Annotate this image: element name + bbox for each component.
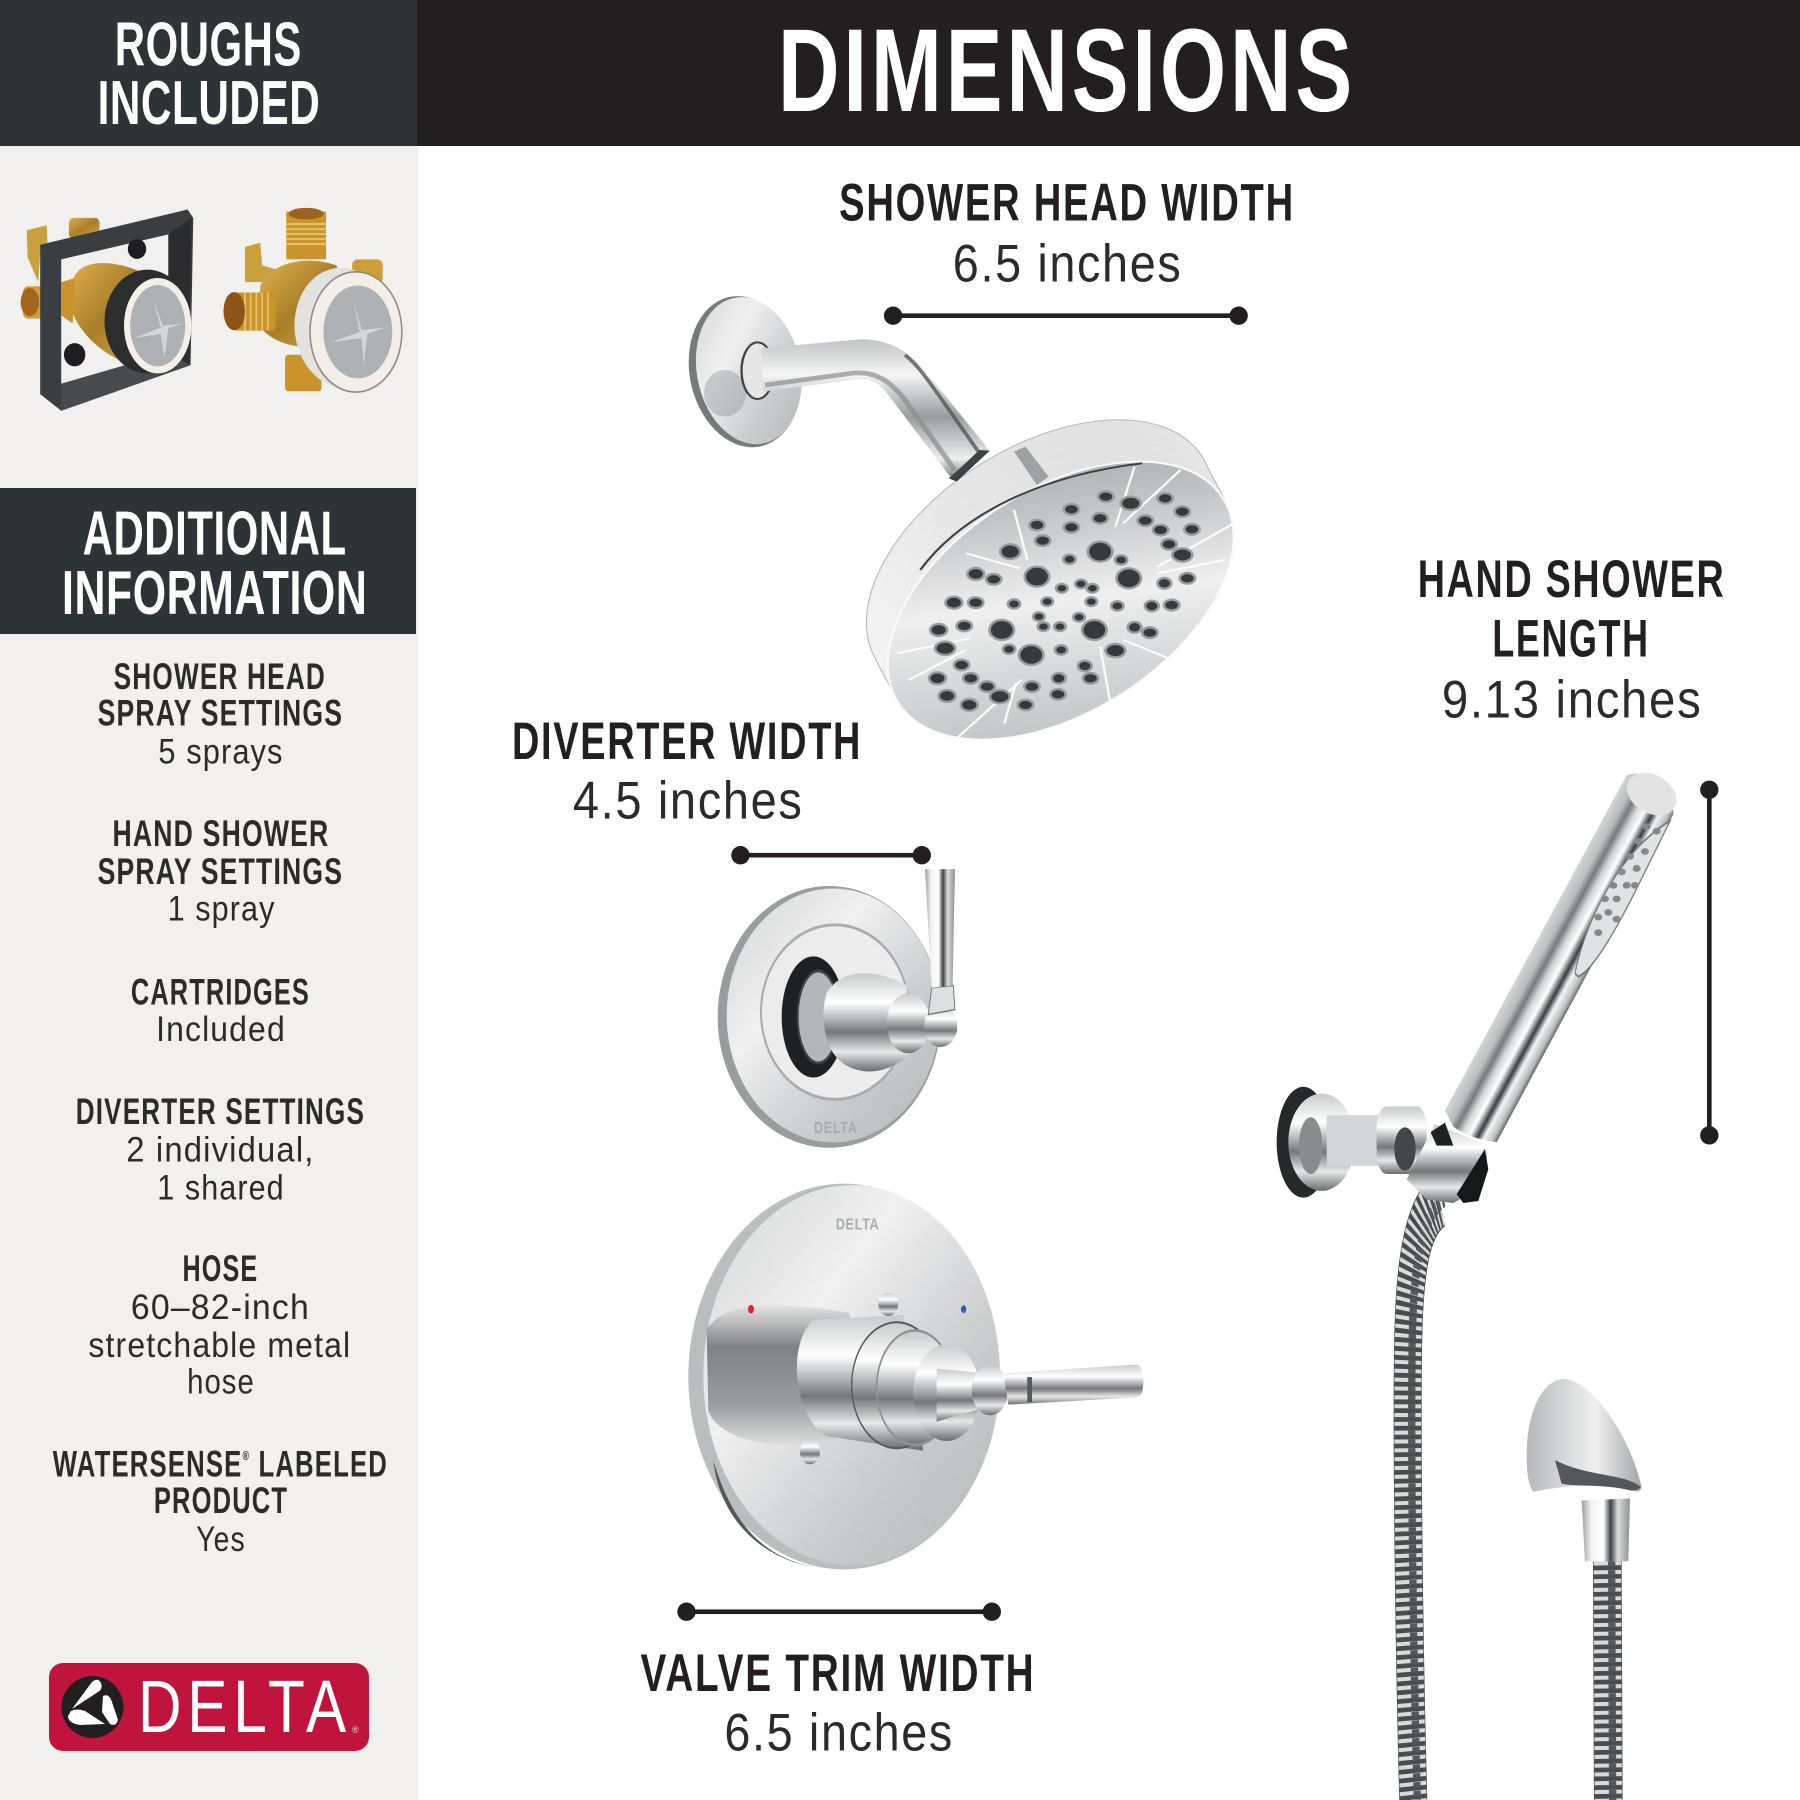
shower head body bbox=[806, 364, 1290, 786]
specification list bbox=[53, 656, 388, 1559]
spec: hose: stretchable metal bbox=[88, 1325, 351, 1365]
spec: shower head spray settings: 5 sprays bbox=[158, 731, 284, 771]
spec: hose: 60–82-inch bbox=[131, 1287, 310, 1327]
label: shower head width: 6.5 inches bbox=[953, 234, 1182, 293]
heading: roughs included: INCLUDED bbox=[98, 69, 320, 138]
spec: watersense labeled product: Yes bbox=[196, 1519, 246, 1559]
band: additional information bbox=[0, 488, 416, 634]
spec: diverter settings: DIVERTER SETTINGS bbox=[76, 1091, 365, 1132]
logo: delta: DELTA bbox=[138, 1665, 352, 1748]
label: valve trim width bbox=[641, 1644, 1035, 1763]
spec: watersense labeled product: PRODUCT bbox=[154, 1480, 288, 1521]
heading: additional information: ADDITIONAL bbox=[83, 499, 347, 568]
valve trim bbox=[688, 1184, 1143, 1569]
label: shower head width: SHOWER HEAD WIDTH bbox=[839, 173, 1295, 232]
left column background bbox=[0, 146, 418, 1800]
logo: delta: ® bbox=[352, 1725, 359, 1735]
rough valve with mounting frame bbox=[21, 210, 193, 411]
label: valve trim width: 6.5 inches bbox=[724, 1704, 954, 1763]
dimension labels and measure lines bbox=[512, 173, 1725, 1763]
spec: diverter settings bbox=[76, 1091, 365, 1208]
spec: watersense labeled product: WATERSENSE bbox=[53, 1443, 324, 1484]
heading: roughs included bbox=[98, 10, 320, 138]
measure line: valve trim width bbox=[677, 1603, 1001, 1621]
illustration: hand shower bbox=[1277, 767, 1678, 1800]
label: diverter width: 4.5 inches bbox=[573, 771, 804, 830]
measure line: diverter width bbox=[731, 846, 931, 864]
spec: hand shower spray settings: SPRAY SETTINGS bbox=[98, 851, 343, 892]
label: hand shower length: LENGTH bbox=[1492, 610, 1650, 669]
spec: hand shower spray settings: 1 spray bbox=[168, 889, 276, 929]
spec: cartridges bbox=[131, 971, 310, 1049]
wall flange bbox=[678, 290, 812, 454]
spec: hand shower spray settings bbox=[98, 813, 343, 929]
label: hand shower length: 9.13 inches bbox=[1442, 670, 1702, 729]
hose to wall elbow bbox=[1607, 1561, 1613, 1800]
label: diverter width bbox=[512, 712, 862, 830]
illustration: rough-in valves bbox=[21, 208, 402, 411]
header band: dimensions title bbox=[417, 0, 1800, 146]
heading: additional information bbox=[62, 499, 367, 628]
spec: hose: HOSE bbox=[183, 1248, 258, 1289]
spec: diverter settings: 1 shared bbox=[157, 1168, 285, 1208]
spec: cartridges: CARTRIDGES bbox=[131, 971, 310, 1012]
header band: dimensions title: DIMENSIONS bbox=[778, 5, 1356, 137]
heading: additional information: INFORMATION bbox=[62, 559, 367, 628]
diverter trim bbox=[718, 869, 957, 1148]
logo: delta bbox=[49, 1663, 369, 1751]
wall bracket bbox=[1277, 1087, 1488, 1203]
heading: roughs included: ROUGHS bbox=[115, 10, 302, 79]
shower arm bbox=[761, 339, 989, 480]
label: valve trim width: VALVE TRIM WIDTH bbox=[641, 1644, 1035, 1703]
spray nozzles bbox=[929, 491, 1200, 711]
spray holes bbox=[1594, 823, 1661, 936]
icon: delta emblem bbox=[62, 1676, 124, 1738]
spec: watersense labeled product: LABELED bbox=[250, 1443, 388, 1484]
spec: shower head spray settings: SPRAY SETTINGS bbox=[98, 693, 343, 734]
engraved text on trims bbox=[814, 1119, 879, 1233]
label: shower head width bbox=[839, 173, 1295, 293]
rough valve without frame bbox=[223, 208, 402, 395]
wall elbow bbox=[1527, 1379, 1642, 1561]
spec: hand shower spray settings: HAND SHOWER bbox=[113, 813, 329, 854]
measure line: shower head width bbox=[884, 307, 1248, 325]
label: hand shower length bbox=[1418, 550, 1725, 729]
hand shower wand bbox=[1445, 767, 1678, 1142]
spec: watersense labeled product bbox=[53, 1443, 388, 1559]
illustration: shower head bbox=[678, 290, 1293, 795]
shower head spray face bbox=[828, 406, 1293, 795]
spec: cartridges: Included bbox=[156, 1009, 286, 1049]
illustration: diverter and valve trim bbox=[688, 869, 1143, 1569]
engraved text on trims: DELTA bbox=[836, 1215, 879, 1233]
spec: hose: hose bbox=[187, 1362, 255, 1402]
spec: diverter settings: 2 individual, bbox=[126, 1130, 315, 1170]
measure line: hand shower length bbox=[1700, 781, 1718, 1145]
spec: hose bbox=[88, 1248, 351, 1402]
spec: watersense labeled product: ® bbox=[243, 1449, 250, 1463]
spec: shower head spray settings bbox=[98, 656, 343, 771]
spec: shower head spray settings: SHOWER HEAD bbox=[114, 656, 326, 697]
hose to hand shower bbox=[1408, 1200, 1444, 1800]
label: diverter width: DIVERTER WIDTH bbox=[512, 712, 862, 771]
header band: roughs included bbox=[0, 0, 417, 146]
engraved text on trims: DELTA bbox=[814, 1119, 858, 1137]
